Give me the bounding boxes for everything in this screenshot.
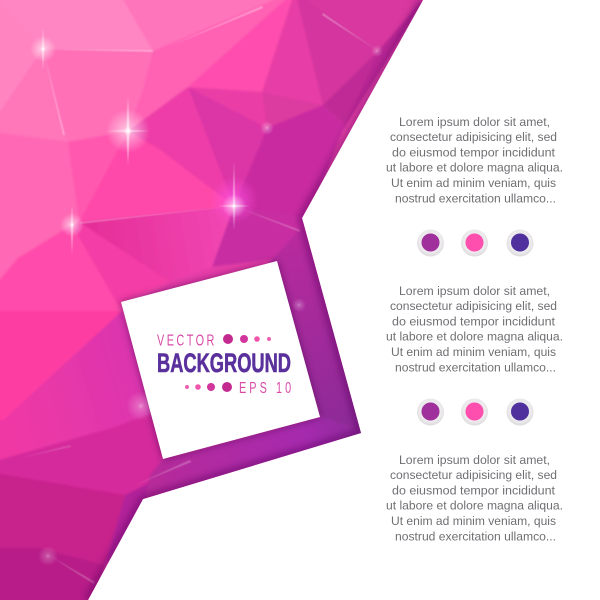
frame band bbox=[143, 218, 370, 505]
text block 2: nostrud exercitation ullamco... bbox=[395, 360, 556, 374]
text block 3: nostrud exercitation ullamco... bbox=[395, 529, 556, 543]
text block 3: Lorem ipsum dolor sit amet, bbox=[399, 453, 550, 467]
text block 1: nostrud exercitation ullamco... bbox=[395, 191, 556, 205]
text block 1: consectetur adipisicing elit, sed bbox=[390, 130, 557, 144]
upper dots bbox=[223, 334, 271, 344]
white label card bbox=[121, 261, 320, 459]
color dots row 2 bbox=[417, 398, 534, 426]
BACKGROUND heading: BACKGROUND bbox=[157, 348, 291, 378]
text block 2 bbox=[386, 284, 563, 374]
VECTOR label: VECTOR bbox=[157, 331, 217, 349]
text block 3: Ut enim ad minim veniam, quis bbox=[391, 514, 556, 528]
lower dots bbox=[185, 382, 232, 392]
polygon facets bbox=[0, 0, 430, 600]
text block 3: ut labore et dolore magna aliqua. bbox=[386, 499, 563, 513]
EPS 10 label: EPS 10 bbox=[239, 379, 294, 397]
text block 2: do eiusmod tempor incididunt bbox=[392, 314, 556, 328]
text block 1: Ut enim ad minim veniam, quis bbox=[391, 176, 556, 190]
text block 2: ut labore et dolore magna aliqua. bbox=[386, 330, 563, 344]
text block 1: Lorem ipsum dolor sit amet, bbox=[399, 115, 550, 129]
text block 3 bbox=[386, 453, 563, 543]
text block 3: do eiusmod tempor incididunt bbox=[392, 483, 556, 497]
text block 3: consectetur adipisicing elit, sed bbox=[390, 468, 557, 482]
inner edge shadow bbox=[88, 0, 423, 600]
text block 2: consectetur adipisicing elit, sed bbox=[390, 299, 557, 313]
color dots row 1 bbox=[417, 230, 534, 256]
text block 2: Ut enim ad minim veniam, quis bbox=[391, 345, 556, 359]
light streaks bbox=[5, 6, 378, 584]
text block 1 bbox=[386, 115, 563, 205]
text block 1: do eiusmod tempor incididunt bbox=[392, 145, 556, 159]
text block 1: ut labore et dolore magna aliqua. bbox=[386, 161, 563, 175]
sparkles bbox=[30, 28, 383, 566]
panel: polygon background bbox=[0, 0, 423, 600]
text block 2: Lorem ipsum dolor sit amet, bbox=[399, 284, 550, 298]
card shadow bbox=[121, 261, 320, 459]
